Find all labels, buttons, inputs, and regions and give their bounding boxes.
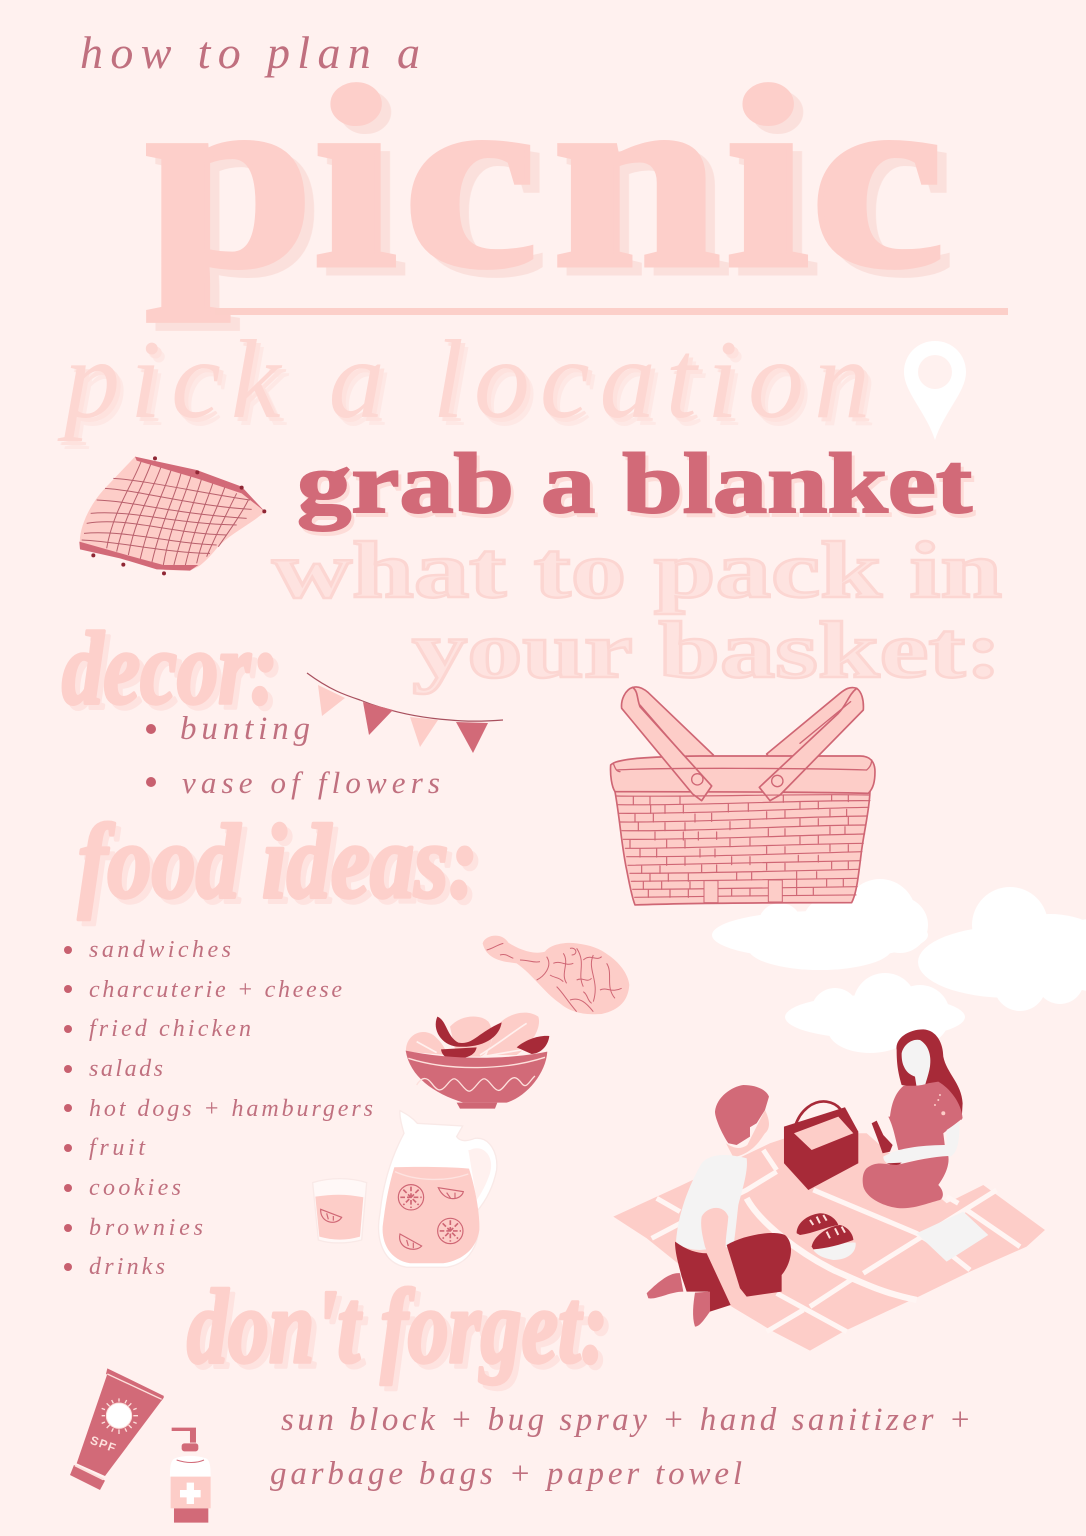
- illustration: couple on picnic blanket: [613, 1029, 1045, 1351]
- shoes: [797, 1213, 856, 1260]
- icon: folded blanket: [79, 456, 266, 575]
- food list: fried chicken: [89, 1016, 251, 1042]
- text: don't forget list: garbage bags + paper towel: [270, 1456, 742, 1492]
- food list: fruit: [89, 1135, 146, 1161]
- picnic blanket: [613, 1133, 1045, 1351]
- icon: lemonade pitcher: [379, 1111, 497, 1267]
- icon: sunscreen tube: SPF: [88, 1433, 119, 1455]
- food list: brownies: [89, 1215, 203, 1241]
- icon: picnic basket: [611, 687, 875, 905]
- food list: [64, 937, 373, 1280]
- text: don't forget list: [270, 1402, 971, 1492]
- front straps: [622, 687, 712, 801]
- icon: salad bowl: [406, 1013, 549, 1109]
- heading: food ideas: food ideas:: [78, 803, 478, 920]
- heading: don't forget: don't forget:: [187, 1268, 608, 1385]
- food list: drinks: [89, 1254, 165, 1280]
- food list: cookies: [89, 1175, 181, 1201]
- woman: [863, 1029, 963, 1208]
- icon: sunscreen tube: [70, 1368, 164, 1490]
- food list: sandwiches: [89, 937, 231, 963]
- heading: pick a location: pick a location: [57, 318, 870, 442]
- basket bag: [784, 1101, 858, 1190]
- rim and body: [615, 792, 870, 905]
- food list: hot dogs + hamburgers: [89, 1096, 373, 1122]
- icon: hand sanitizer: [170, 1428, 211, 1523]
- clouds: [712, 879, 1086, 1053]
- icon: bunting: [307, 673, 503, 753]
- heading: how to plan a: how to plan a: [80, 27, 420, 78]
- food list: charcuterie + cheese: [89, 977, 342, 1003]
- title: picnic: picnic: [145, 34, 945, 322]
- icon: fried chicken: [483, 936, 629, 1014]
- heading: decor: decor:: [62, 611, 278, 726]
- heading: what to pack in your basket: your basket:: [412, 607, 1002, 695]
- title underline: [215, 308, 1008, 315]
- heading: what to pack in your basket: what to pack in: [272, 527, 1002, 615]
- food list: salads: [89, 1056, 163, 1082]
- icon: glass of lemonade: [313, 1179, 367, 1243]
- heading: grab a blanket: grab a blanket: [297, 435, 972, 531]
- decor list: vase of flowers: [182, 765, 440, 800]
- icon: location pin: [904, 341, 966, 440]
- text: don't forget list: sun block + bug spray + hand sanitizer +: [281, 1402, 971, 1438]
- heading: what to pack in your basket: [272, 527, 1002, 695]
- decor list: [146, 711, 440, 800]
- back of handles: [630, 687, 713, 780]
- decor list: bunting: [180, 711, 310, 747]
- man: [647, 1085, 791, 1327]
